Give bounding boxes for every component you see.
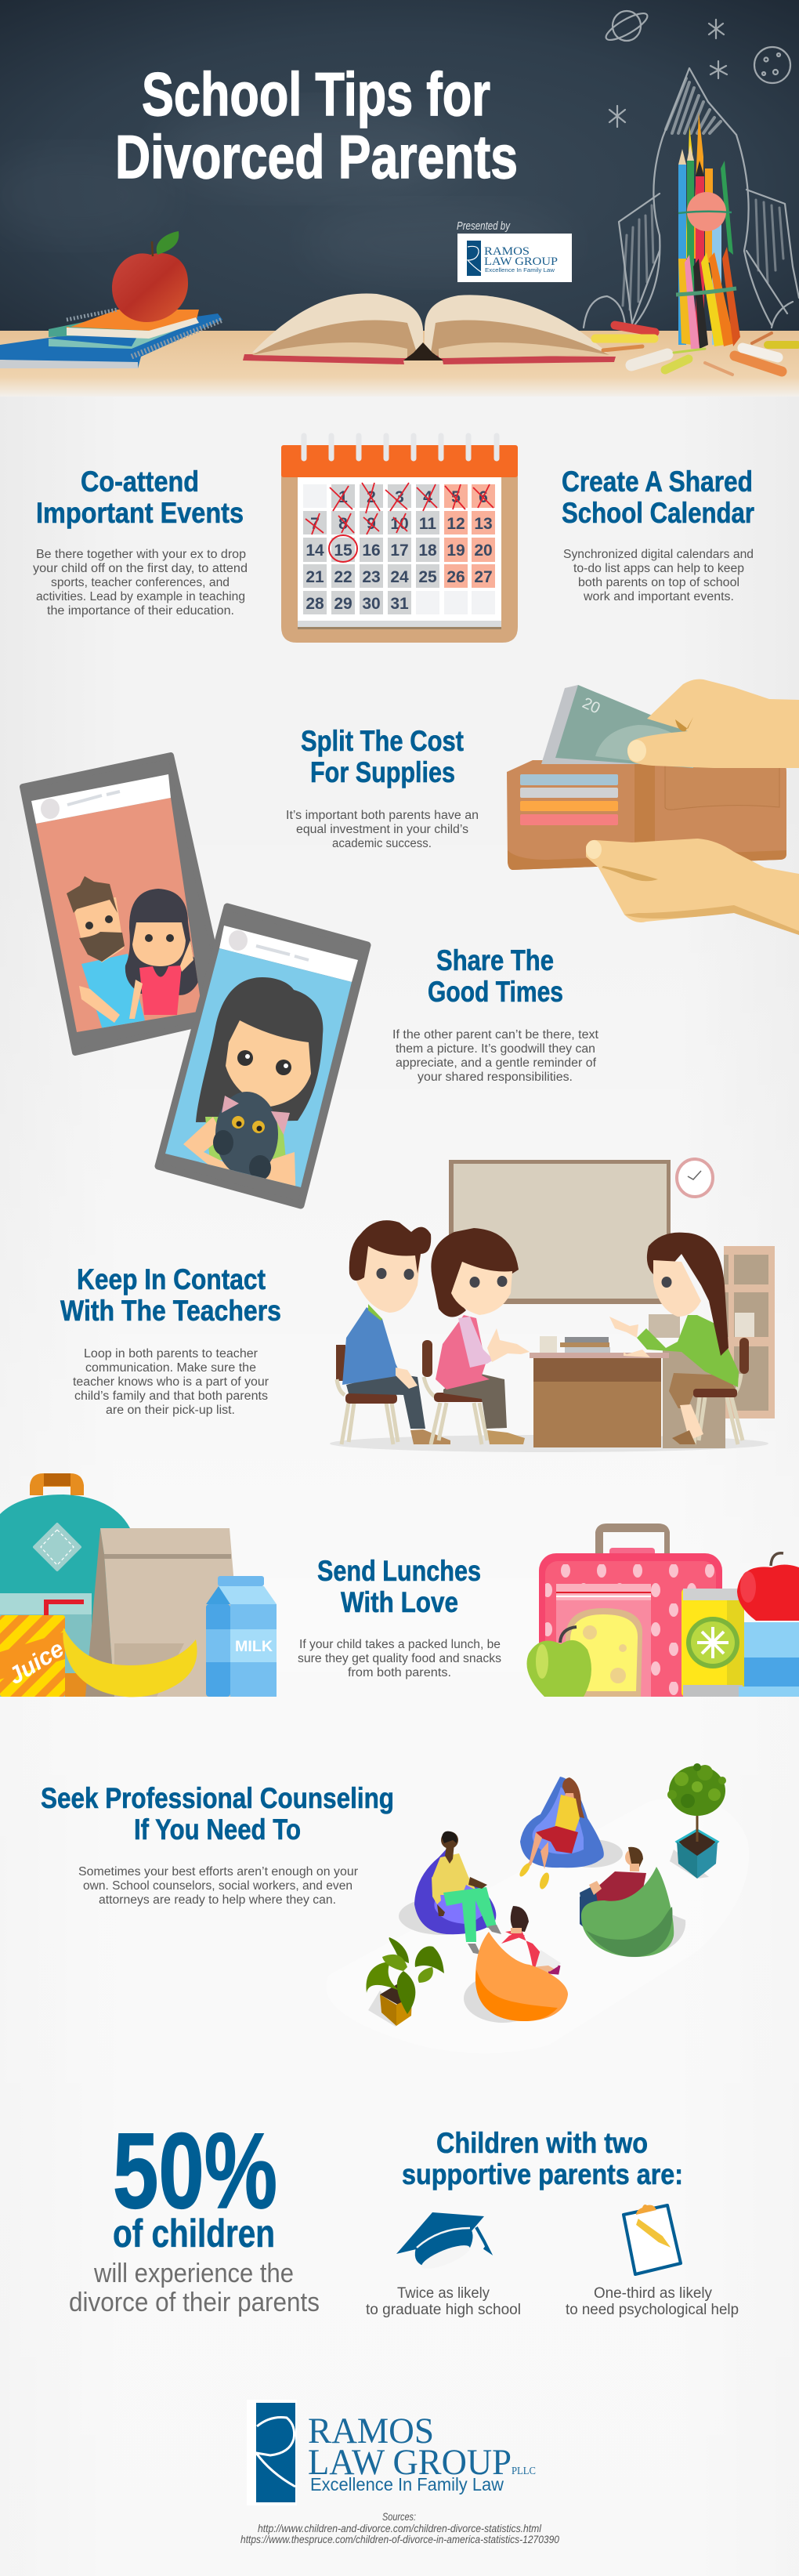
teacher (609, 1233, 749, 1444)
text block: sports, teacher conferences, and (51, 576, 230, 589)
floor shadow (330, 1435, 768, 1452)
panel: send lunches with love (298, 1555, 501, 1679)
heading: Important Events (36, 497, 244, 529)
header logo: RAMOS (484, 245, 530, 258)
heading: Children with two (436, 2127, 648, 2159)
text block: Loop in both parents to teacher (84, 1347, 258, 1360)
text block: graduate: Twice as likely (397, 2285, 490, 2302)
icon: apple (112, 231, 188, 322)
icon: backpack (0, 1473, 137, 1697)
icon: red apple and food box (737, 1553, 799, 1697)
heading: For Supplies (310, 756, 455, 788)
text block: Sometimes your best efforts aren’t enough on your (78, 1865, 358, 1879)
footer logo (247, 2400, 536, 2505)
heading: Create A Shared (562, 466, 753, 498)
icon: chalk rocket drawing (584, 9, 799, 328)
heading: With Love (341, 1586, 458, 1618)
bookshelf (649, 1246, 775, 1448)
icon: chalk and clips (595, 325, 797, 375)
text block (563, 548, 754, 603)
heading (317, 1555, 481, 1618)
text block: communication. Make sure the (85, 1361, 256, 1375)
icon: calendar: 17 (390, 542, 409, 560)
icon: calendar: 4 (423, 488, 432, 506)
heading: With The Teachers (60, 1295, 281, 1327)
heading: Seek Professional Counseling (41, 1782, 394, 1814)
text block: If the other parent can’t be there, text (392, 1028, 599, 1042)
icon: phone with family photo (23, 755, 229, 1053)
text block (78, 1865, 358, 1907)
upper hand (627, 679, 799, 768)
icon: notebooks (0, 310, 222, 368)
icon: drink can (682, 1589, 744, 1697)
text block (69, 2259, 320, 2317)
text block: to-do list apps can help to keep (573, 562, 744, 575)
footer logo: Excellence In Family Law (310, 2474, 504, 2494)
icon: graduation cap (396, 2212, 489, 2273)
illustration: classroom meeting (330, 1159, 775, 1452)
icon: calendar: 11 (419, 515, 436, 533)
text block: work and important events. (583, 590, 734, 603)
icon: lunchbox (539, 1523, 722, 1697)
heading: Good Times (428, 976, 563, 1008)
icon: open book (243, 293, 616, 364)
text block: academic success. (332, 837, 432, 850)
icon: calendar: 20 (474, 542, 493, 560)
icon: calendar: 28 (306, 595, 324, 613)
text block: Synchronized digital calendars and (563, 548, 754, 561)
text block: both parents on top of school (578, 576, 739, 589)
cat (215, 1092, 278, 1176)
text block: equal investment in your child’s (296, 823, 468, 836)
heading: Co-attend (81, 466, 199, 498)
banknote (541, 685, 693, 764)
text block: activities. Lead by example in teaching (36, 590, 245, 603)
header logo (457, 234, 572, 282)
title: Divorced Parents (115, 122, 518, 191)
text block: Be there together with your ex to drop (36, 548, 246, 561)
icon: calendar: 25 (418, 568, 437, 586)
text block: are on their pick-up list. (106, 1404, 235, 1417)
text block: graduate (366, 2285, 521, 2318)
text block: sure they get quality food and snacks (298, 1652, 501, 1665)
heading (60, 1263, 281, 1327)
heading: Send Lunches (317, 1555, 481, 1587)
icon: calendar: 16 (362, 542, 381, 560)
text block: your child off on the first day, to attend (33, 562, 248, 575)
header logo: Excellence In Family Law (485, 268, 555, 274)
text block: attorneys are ready to help where they can. (99, 1893, 336, 1907)
icon: calendar: 26 (446, 568, 465, 586)
sources: http://www.children-and-divorce.com/children-divorce-statistics.html (258, 2523, 542, 2534)
floor blob (326, 1798, 749, 2053)
icon: calendar: 3 (395, 488, 404, 506)
icon: calendar: 2 (367, 488, 376, 506)
icon: calendar: 5 (451, 488, 461, 506)
panel: split the cost for supplies (286, 725, 479, 850)
illustration: counseling group (326, 1763, 749, 2053)
heading (428, 944, 563, 1008)
panel: co-attend important events (33, 466, 248, 618)
icon: calendar: 8 (338, 515, 348, 533)
icon: chalk planet (613, 11, 641, 41)
panel: share the good times (392, 944, 599, 1084)
sources (240, 2511, 559, 2545)
icon: wallet with money and hands: 20 (580, 694, 602, 718)
icon: milk carton (206, 1576, 277, 1697)
heading: supportive parents are: (402, 2158, 683, 2190)
wallet (507, 760, 786, 870)
panel: chalkboard header (0, 0, 799, 397)
text block: the importance of their education. (47, 604, 234, 618)
text block: It’s important both parents have an (286, 809, 479, 822)
icon: calendar: 10 (390, 515, 409, 533)
heading (562, 466, 754, 529)
purple beanbag with man (399, 1831, 501, 1955)
heading (402, 2127, 683, 2190)
text block: your shared responsibilities. (418, 1071, 573, 1084)
plant: potted plant (366, 1937, 444, 2027)
whiteboard (449, 1160, 671, 1304)
panel: seek professional counseling (41, 1782, 394, 1907)
table top (0, 331, 799, 397)
icon: calendar: 24 (390, 568, 409, 586)
text block: psychological help: to need psychological help (566, 2302, 739, 2318)
header logo: LAW GROUP (484, 255, 558, 268)
panel: keep in contact with the teachers (60, 1263, 281, 1417)
icon: calendar: 6 (479, 488, 488, 506)
heading: If You Need To (134, 1813, 301, 1846)
panel: 50 percent statistic (69, 2111, 320, 2317)
footer logo: LAW GROUP (308, 2442, 512, 2483)
icon: calendar: 29 (334, 595, 352, 613)
panel: create a shared school calendar (562, 466, 754, 603)
blue beanbag with woman (518, 1777, 623, 1890)
icon: chalk stars (609, 20, 727, 127)
presented by label: Presented by (457, 219, 511, 233)
text block: psychological help (566, 2285, 739, 2318)
icon: banana (63, 1628, 197, 1697)
text block: child’s family and that both parents (74, 1389, 268, 1403)
sources: Sources: (382, 2511, 416, 2523)
father (336, 1220, 450, 1444)
text block: divorce of their parents (69, 2288, 320, 2317)
heading: Split The Cost (301, 725, 464, 757)
icon: calendar: 23 (362, 568, 381, 586)
icon: calendar: 22 (334, 568, 352, 586)
text block: appreciate, and a gentle reminder of (396, 1056, 597, 1070)
panel: two supportive parents (366, 2127, 739, 2318)
text block: psychological help: One-third as likely (594, 2285, 712, 2302)
text block (286, 809, 479, 850)
icon: green apple (526, 1627, 591, 1697)
text block (33, 548, 248, 618)
icon: calendar: 12 (446, 515, 465, 533)
icon: calendar: 1 (338, 488, 348, 506)
plant: tree (667, 1763, 726, 1879)
heading: Keep In Contact (77, 1263, 266, 1295)
text block (298, 1638, 501, 1679)
clock (677, 1159, 713, 1197)
icon: calendar: 27 (474, 568, 493, 586)
text block (73, 1347, 269, 1417)
big number: 50% (113, 2111, 277, 2231)
icon: calendar: 9 (367, 515, 376, 533)
icon: juice box: Juice (4, 1636, 69, 1690)
icon: calendar (281, 436, 518, 643)
subheading: of children (113, 2212, 275, 2255)
heading (301, 725, 464, 788)
text block: own. School counselors, social workers, and even (83, 1879, 352, 1893)
icon: calendar: 14 (306, 542, 324, 560)
lower hand (586, 839, 799, 935)
heading (41, 1782, 394, 1846)
icon: milk carton: MILK (235, 1639, 273, 1655)
red crosses (306, 483, 494, 562)
icon: paper bag (85, 1528, 239, 1697)
icon: clipboard (624, 2205, 681, 2274)
icon: phone with girl and cat photo (158, 907, 367, 1207)
eraser (687, 192, 726, 231)
heading (36, 466, 244, 529)
text block: them a picture. It’s goodwill they can (396, 1042, 595, 1056)
orange beanbag with woman (464, 1906, 568, 2023)
icon: chalk moon (754, 47, 790, 83)
icon: calendar: 13 (474, 515, 493, 533)
spiral rings (304, 436, 497, 458)
footer logo: RAMOS (308, 2411, 434, 2451)
mother (125, 889, 201, 1019)
icon: calendar: 19 (446, 542, 465, 560)
mother (422, 1228, 530, 1444)
father (67, 876, 145, 1034)
text block: teacher knows who is a part of your (73, 1375, 269, 1389)
icon: calendar: 30 (362, 595, 381, 613)
sources: https://www.thespruce.com/children-of-divorce-in-america-statistics-1270390 (240, 2534, 559, 2545)
footer logo: PLLC (512, 2465, 536, 2477)
icon: calendar: 15 (334, 542, 352, 560)
text block: from both parents. (348, 1666, 451, 1679)
title: School Tips for (142, 60, 490, 129)
icon: pencils (676, 112, 740, 349)
icon: calendar: 21 (306, 568, 324, 586)
heading: School Calendar (562, 497, 754, 529)
text block (392, 1028, 599, 1084)
green beanbag with man (580, 1847, 685, 1957)
text block: If your child takes a packed lunch, be (299, 1638, 501, 1651)
text block: graduate: to graduate high school (366, 2302, 521, 2318)
icon: calendar: 7 (310, 515, 320, 533)
desk with books (530, 1336, 669, 1447)
title (115, 60, 518, 191)
text block: will experience the (93, 2259, 294, 2288)
icon: calendar: 31 (390, 595, 409, 613)
icon: juice box (0, 1602, 84, 1697)
heading: Share The (436, 944, 554, 976)
icon: wallet with money and hands (507, 679, 799, 935)
icon: calendar: 18 (418, 542, 437, 560)
